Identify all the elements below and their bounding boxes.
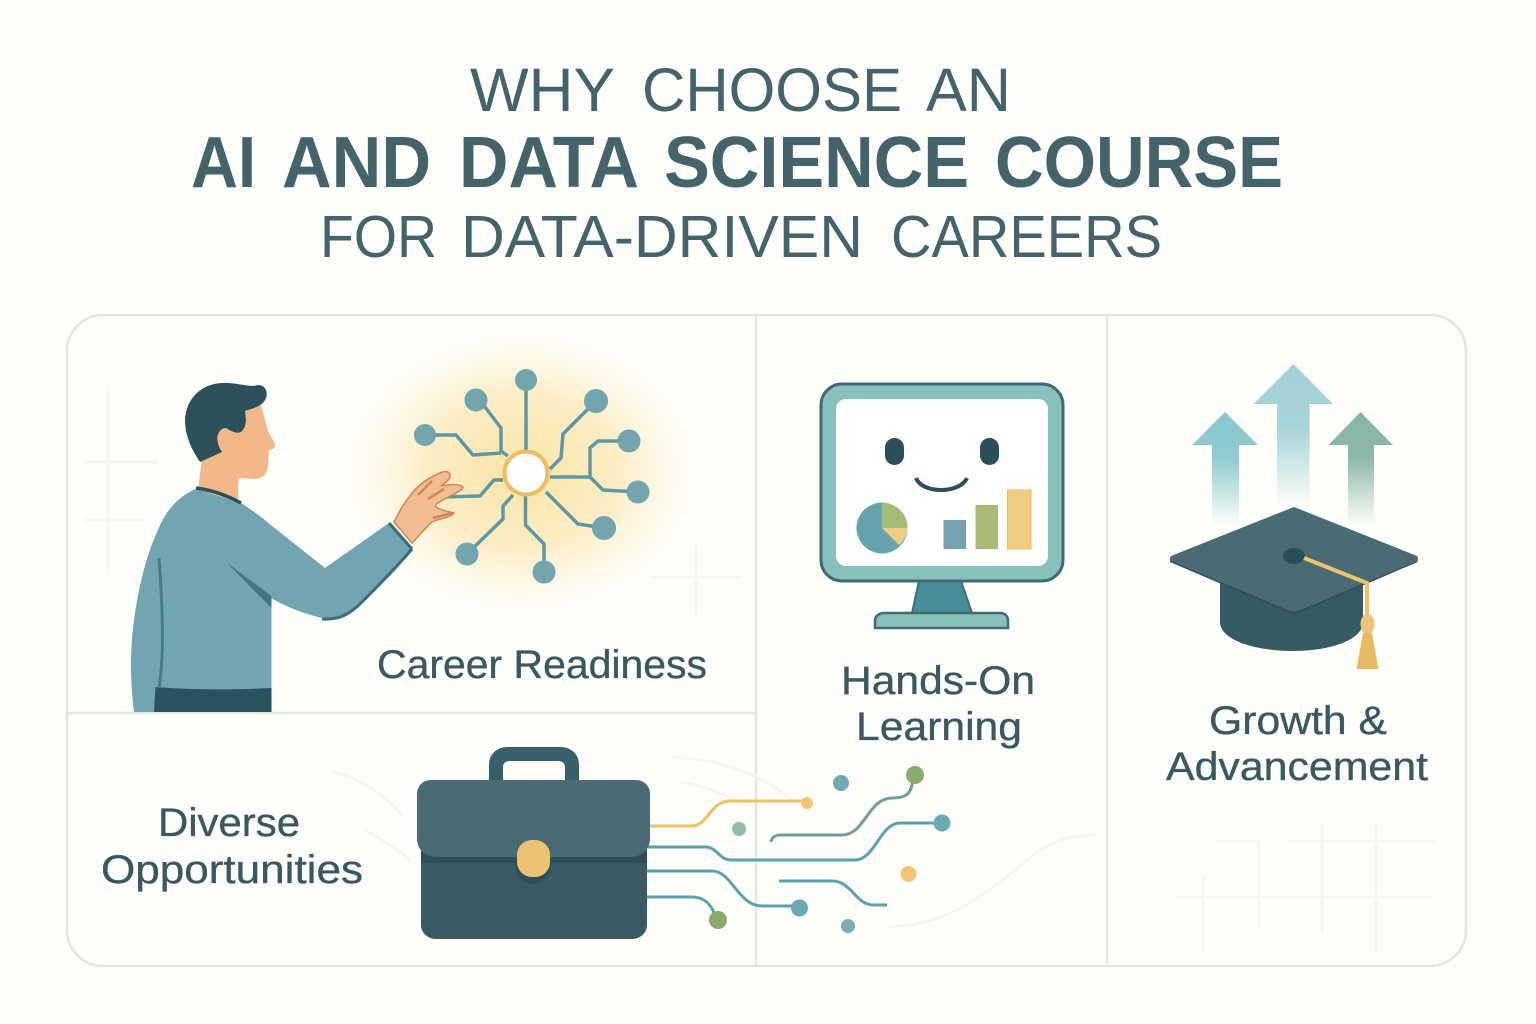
title: CHOOSE [642,56,902,124]
panel frame: four-section grid [67,315,1466,966]
title: AN [926,56,1011,124]
pie chart [856,502,908,554]
icon: briefcase [417,747,650,939]
title: SCIENCE [664,123,969,203]
title: AND [282,123,431,203]
ear [217,427,232,448]
faint background texture [85,385,1435,953]
label: hands-on learning: Hands-On [841,659,1035,703]
panel: hands-on learning [821,384,1063,749]
sweater [131,489,412,712]
hair [185,383,267,462]
person [131,383,463,712]
icon: rising arrows [1192,364,1393,525]
label: growth and advancement: Advancement [1166,745,1428,789]
bar chart [944,520,966,549]
label: growth and advancement: Growth & [1209,699,1387,743]
icon: data wires [647,766,950,933]
title: DATA [459,123,639,203]
title: WHY [470,56,615,124]
title: DATA-DRIVEN [461,204,863,270]
label: diverse opportunities [101,801,363,892]
label: diverse opportunities: Opportunities [101,848,363,892]
monitor face [885,438,904,465]
icon: monitor [821,384,1063,628]
icon: graduation cap [1170,507,1418,669]
sweater seams [159,558,162,688]
title: FOR [320,204,437,270]
neck and face [198,400,275,506]
trousers [154,687,272,712]
title: AI [191,123,256,203]
hand [394,472,463,543]
glow behind network [344,330,700,614]
title [191,56,1283,270]
title: CAREERS [891,204,1162,270]
panel: diverse opportunities [101,747,950,939]
label: career readiness: Career Readiness [377,643,707,687]
label: hands-on learning: Learning [856,705,1022,749]
label: growth and advancement [1166,699,1428,789]
icon: neural network [414,369,650,584]
title: COURSE [995,123,1283,203]
label: hands-on learning [841,659,1035,749]
panel: career readiness [131,330,707,712]
panel: growth and advancement [1166,364,1428,789]
label: diverse opportunities: Diverse [158,801,300,845]
